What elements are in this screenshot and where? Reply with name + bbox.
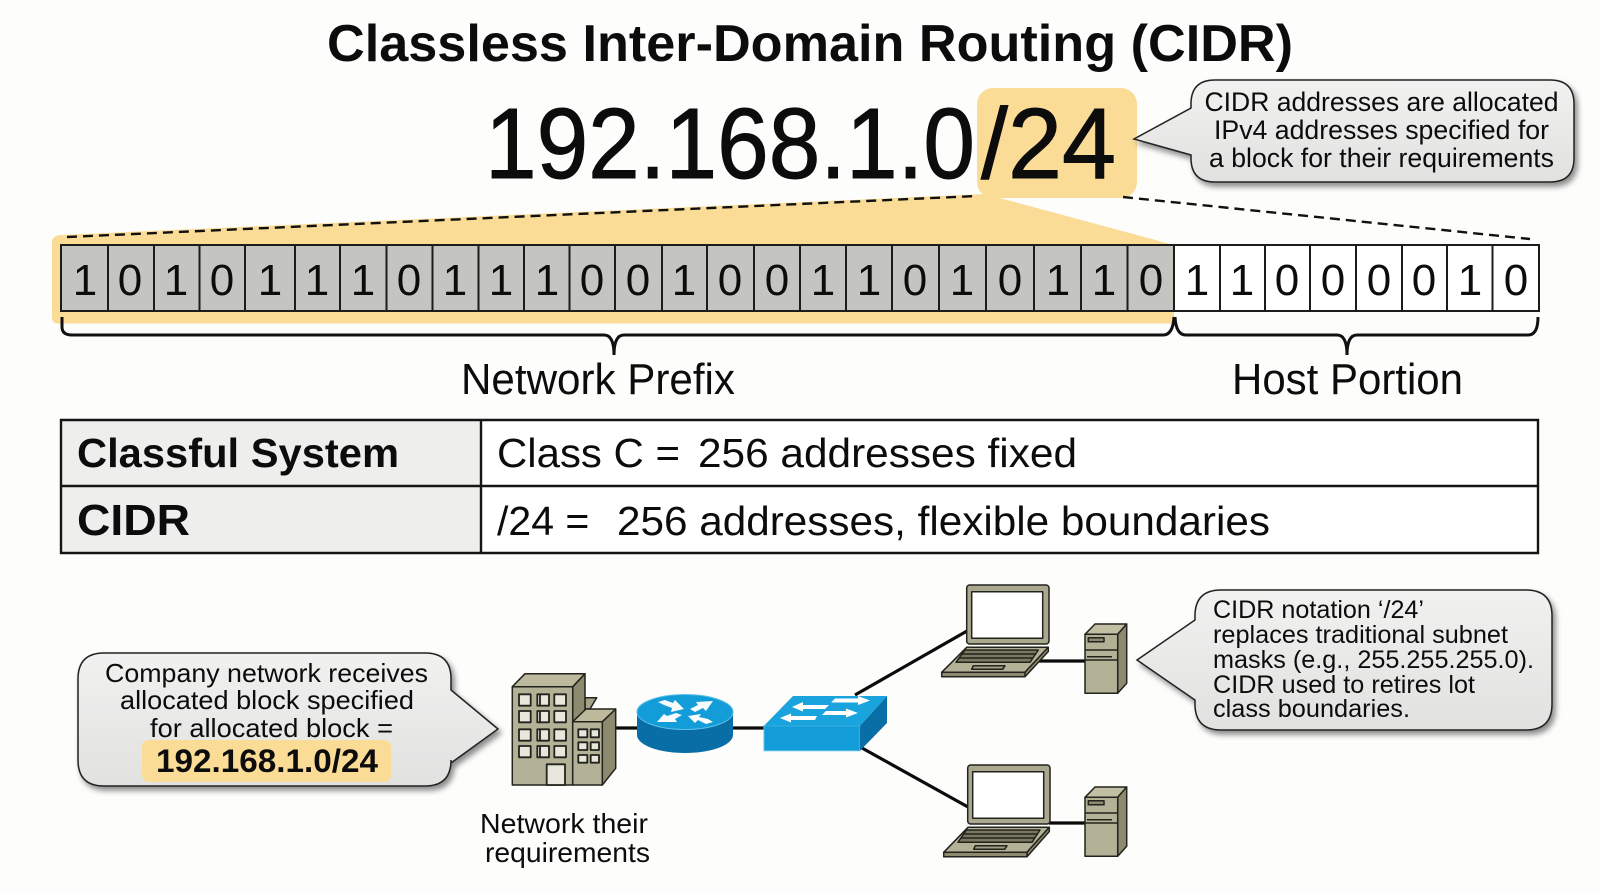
icon: laptop bottom — [944, 765, 1050, 857]
callout: CIDR addresses: IPv4 addresses specified for — [1214, 115, 1549, 145]
binary bit strip — [61, 245, 1539, 311]
label: network prefix: Network Prefix — [461, 355, 735, 404]
label: network requirements: requirements — [485, 837, 650, 868]
row: classful system: Classful System — [77, 430, 399, 476]
network prefix bits: 1 — [258, 256, 282, 305]
network prefix bits: 1 — [164, 256, 188, 305]
network connection lines — [615, 631, 1086, 823]
row: CIDR — [77, 496, 1270, 545]
label: network requirements — [480, 808, 650, 868]
network prefix bits: 0 — [580, 256, 604, 305]
host bits — [1174, 245, 1539, 311]
callout: company network: 192.168.1.0/24 — [156, 743, 378, 779]
host bits: 1 — [1458, 256, 1482, 305]
host bits: 0 — [1504, 256, 1528, 305]
title: Classless Inter-Domain Routing (CIDR) — [327, 15, 1293, 73]
host bits: 0 — [1412, 256, 1436, 305]
icon: laptop top — [942, 585, 1049, 677]
row: CIDR: CIDR — [77, 496, 190, 545]
callout: CIDR notation: class boundaries. — [1213, 695, 1410, 723]
CIDR address: 192.168.1.0 — [485, 88, 975, 200]
host bits: 1 — [1185, 256, 1209, 305]
callout: company network: Company network receives — [105, 658, 428, 688]
network prefix bits: 1 — [672, 256, 696, 305]
callout: CIDR addresses — [1134, 80, 1574, 182]
CIDR address: /24 — [981, 88, 1116, 200]
network prefix bits: 1 — [1046, 256, 1070, 305]
network prefix bits: 0 — [998, 256, 1022, 305]
callout: CIDR addresses: a block for their requirements — [1209, 143, 1554, 173]
label: host portion: Host Portion — [1232, 355, 1463, 404]
callout: CIDR notation: CIDR notation ‘/24’ — [1213, 596, 1424, 624]
network prefix bits: 0 — [765, 256, 789, 305]
network prefix bits: 0 — [118, 256, 142, 305]
icon: server bottom — [1085, 787, 1127, 856]
network prefix bits: 0 — [1139, 256, 1163, 305]
network prefix bits: 1 — [489, 256, 513, 305]
callout: CIDR notation: masks (e.g., 255.255.255.0). — [1213, 646, 1534, 674]
callout: CIDR notation: CIDR used to retires lot — [1213, 671, 1475, 699]
brace: network prefix — [62, 317, 1174, 355]
dashed zoom lines — [67, 196, 1530, 239]
callout: company network — [78, 653, 498, 786]
row: classful system: 256 addresses fixed — [698, 430, 1077, 476]
row: classful system: Class C = — [497, 430, 680, 476]
host bits: 0 — [1367, 256, 1391, 305]
network prefix bits: 0 — [210, 256, 234, 305]
callout: company network: for allocated block = — [150, 713, 393, 743]
icon: server top — [1085, 624, 1127, 693]
icon: office building — [512, 674, 616, 785]
callout: company network: allocated block specified — [120, 685, 414, 715]
network prefix bits: 0 — [397, 256, 421, 305]
comparison table — [61, 420, 1538, 553]
network prefix bits: 1 — [811, 256, 835, 305]
network prefix bits — [61, 245, 1174, 311]
network prefix bits: 1 — [351, 256, 375, 305]
network prefix bits: 0 — [626, 256, 650, 305]
network prefix bits: 1 — [535, 256, 559, 305]
network prefix bits: 1 — [1092, 256, 1116, 305]
label: network requirements: Network their — [480, 808, 648, 839]
host bits: 1 — [1230, 256, 1254, 305]
network prefix bits: 1 — [950, 256, 974, 305]
icon: router — [637, 694, 733, 753]
network prefix bits: 1 — [857, 256, 881, 305]
row: classful system — [77, 430, 1077, 476]
network prefix bits: 1 — [73, 256, 97, 305]
network prefix bits: 0 — [718, 256, 742, 305]
network prefix bits: 1 — [443, 256, 467, 305]
network prefix bits: 0 — [903, 256, 927, 305]
callout: CIDR notation — [1137, 590, 1552, 730]
host bits: 0 — [1275, 256, 1299, 305]
network prefix bits: 1 — [305, 256, 329, 305]
brace: host portion — [1175, 317, 1538, 355]
callout: CIDR addresses: CIDR addresses are allocated — [1204, 87, 1558, 117]
host bits: 0 — [1321, 256, 1345, 305]
callout: CIDR notation: replaces traditional subnet — [1213, 621, 1508, 649]
icon: switch — [764, 696, 887, 751]
row: CIDR: 256 addresses, flexible boundaries — [617, 498, 1270, 544]
yellow highlight: prefix fan and bit band — [52, 88, 1174, 324]
row: CIDR: /24 = — [497, 498, 589, 544]
